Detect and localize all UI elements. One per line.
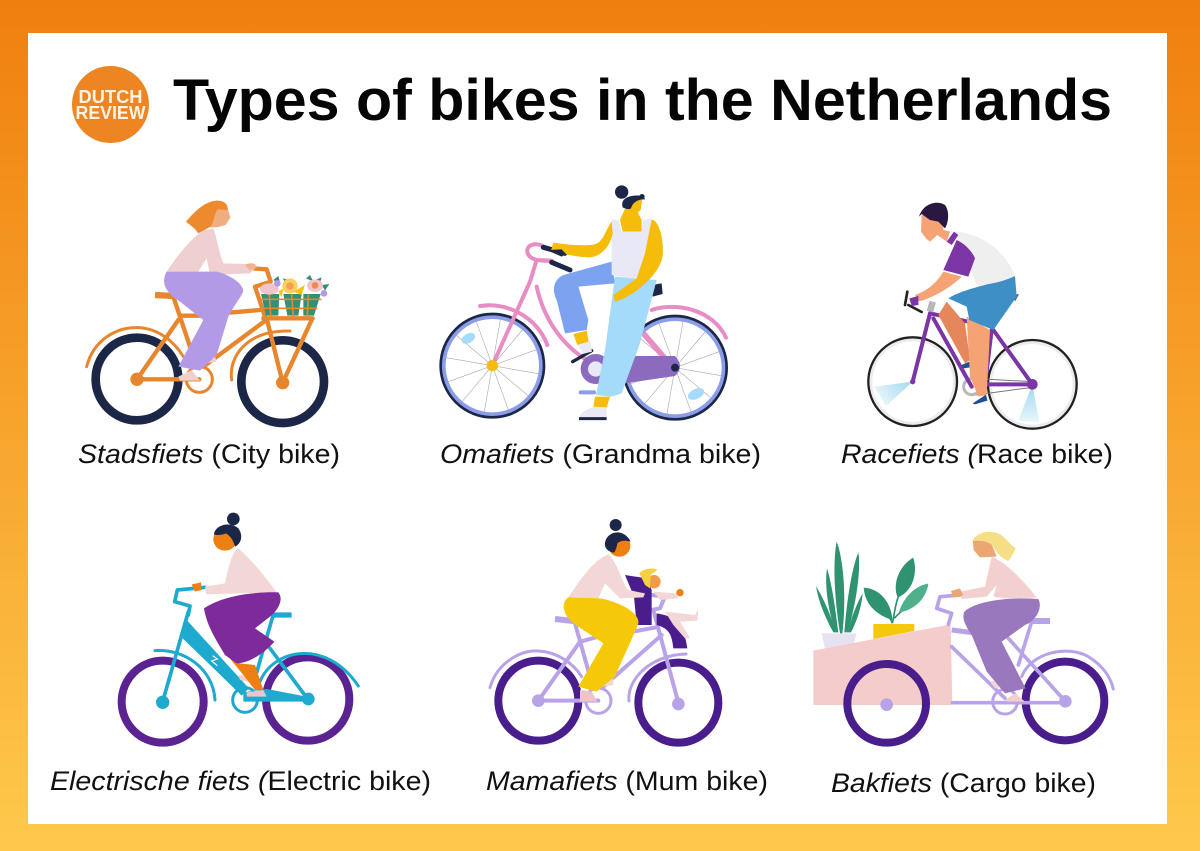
logo: Dutch Review: REVIEW [76, 102, 146, 123]
illustration: electric bike [122, 513, 358, 743]
illustration: cargo bike [813, 532, 1113, 743]
caption: grandma bike: Omafiets (Grandma bike) [440, 439, 761, 469]
illustration: grandma bike [441, 185, 727, 419]
caption: city bike: Stadsfiets (City bike) [78, 439, 340, 469]
caption: mum bike: Mamafiets (Mum bike) [486, 766, 768, 796]
logo: Dutch Review [72, 66, 149, 143]
logo: Dutch Review: DUTCH [78, 86, 142, 107]
caption: electric bike: Electrische fiets ( Electric bike) [50, 766, 431, 796]
caption: race bike: Racefiets ( Race bike) [841, 439, 1113, 469]
illustration: race bike [868, 203, 1077, 429]
title: Types of bikes in the Netherlands [173, 68, 1112, 133]
caption: cargo bike: Bakfiets (Cargo bike) [831, 768, 1096, 798]
illustration: mum bike [490, 519, 718, 743]
illustration: city bike [87, 201, 329, 423]
